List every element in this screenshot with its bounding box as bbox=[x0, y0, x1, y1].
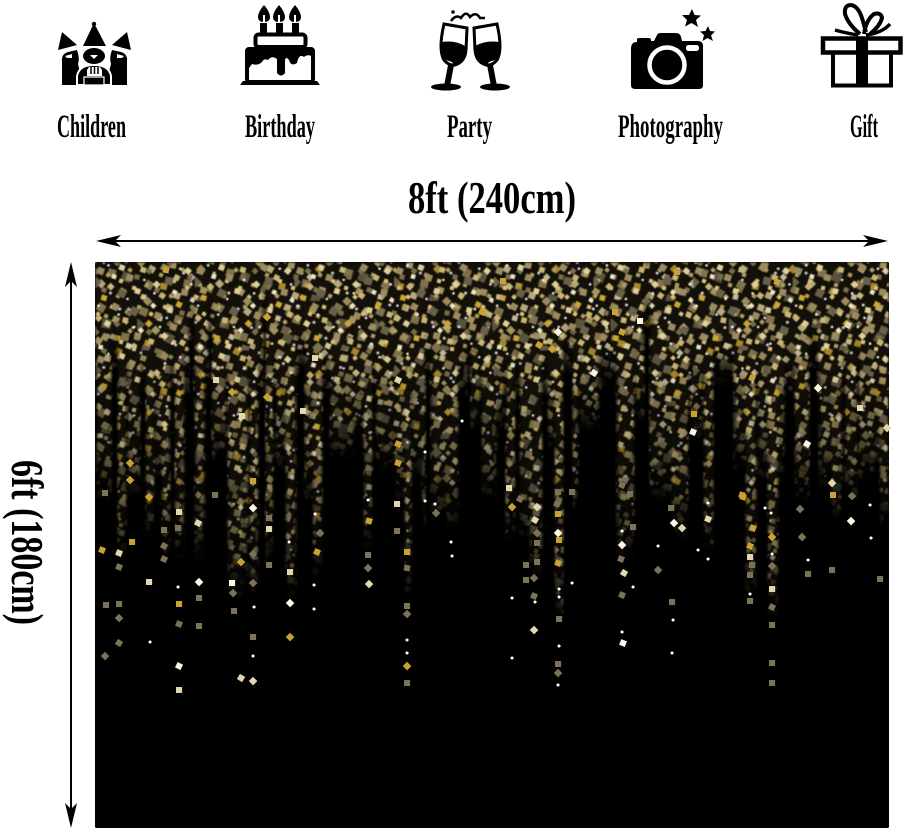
height dimension label: 6ft (180cm) bbox=[2, 460, 52, 625]
height arrow bbox=[65, 262, 77, 828]
glitter curtain bbox=[95, 262, 889, 614]
hand-placed glitter: dim grey-brown squares bbox=[105, 485, 880, 683]
hand-placed glitter: white dots bbox=[150, 421, 871, 685]
icon: champagne glasses bbox=[431, 10, 510, 91]
label: Party: Party bbox=[447, 109, 492, 145]
hand-placed glitter: bright white squares bbox=[179, 321, 851, 666]
label: Birthday: Birthday bbox=[245, 109, 315, 145]
label: Children: Children bbox=[57, 109, 126, 145]
icon: children bbox=[58, 22, 131, 85]
hand-placed glitter: gold squares bbox=[102, 270, 833, 666]
infographic canvas: Gift bbox=[850, 109, 878, 145]
icon: camera with stars bbox=[631, 9, 715, 89]
icon: birthday cake bbox=[240, 5, 320, 85]
width dimension label: 8ft (240cm) bbox=[408, 173, 576, 223]
icon: gift box bbox=[823, 5, 900, 86]
width arrow bbox=[96, 235, 888, 247]
hand-placed glitter: pale squares bbox=[119, 325, 887, 690]
photo panel: black backdrop with gold glitter curtain bbox=[95, 262, 889, 828]
label: Photography: Photography bbox=[618, 109, 723, 145]
